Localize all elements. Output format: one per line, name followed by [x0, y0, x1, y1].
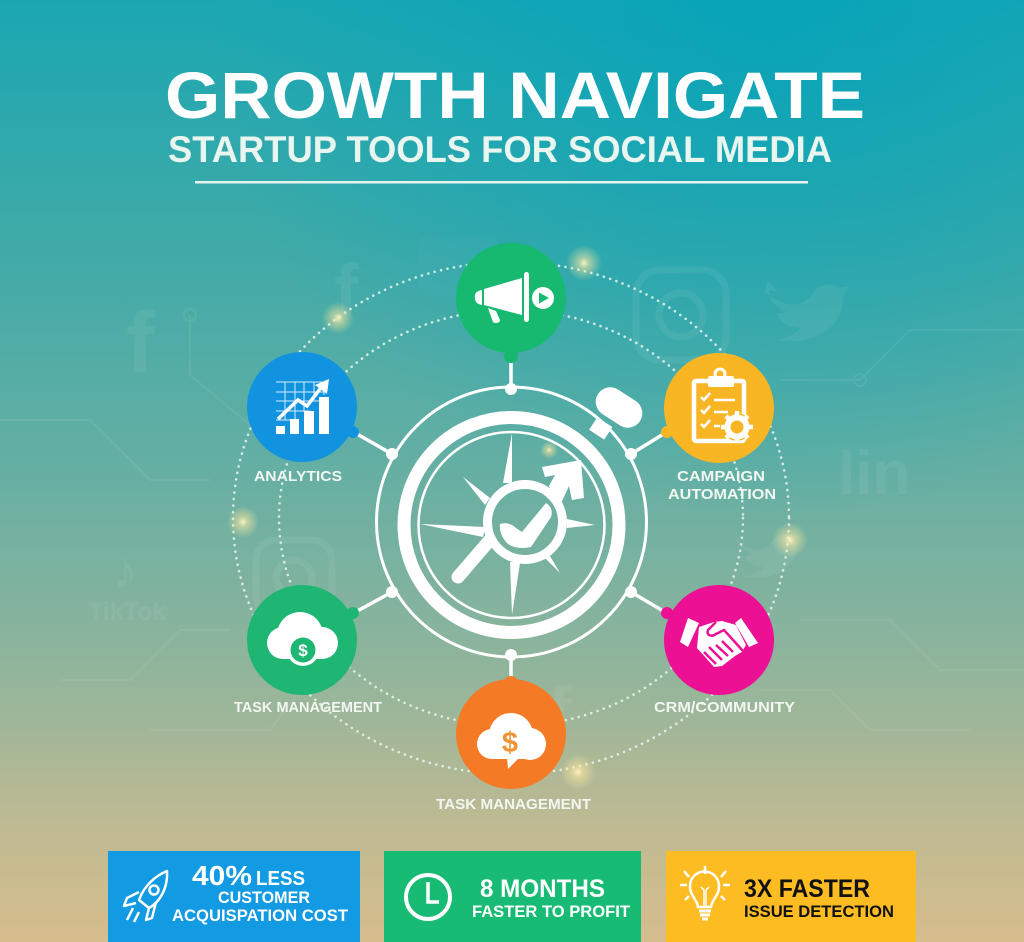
outer thin ring [376, 387, 646, 657]
faint social media watermarks [88, 236, 910, 750]
stat text: ACQUISPATION COST [172, 906, 349, 925]
faint social media watermarks: lin [838, 439, 910, 508]
subtitle: STARTUP TOOLS FOR SOCIAL MEDIA [168, 129, 832, 170]
icon: cloud with dollar [267, 612, 338, 666]
stat text: 3X FASTER [744, 875, 870, 903]
icon: light bulb [680, 866, 730, 919]
magnifier handle [458, 541, 489, 577]
icon: cloud speech bubble with dollar [477, 713, 546, 769]
label: TASK MANAGEMENT [234, 699, 382, 716]
thick ring [404, 418, 619, 632]
stat text [472, 875, 631, 921]
icon: megaphone [475, 272, 554, 323]
dotted orbit rings [233, 262, 789, 774]
faint social media watermarks: f [126, 295, 155, 391]
label: TASK MANAGEMENT [436, 796, 591, 813]
node: campaign automation [661, 353, 776, 503]
stat text: 40% [192, 860, 252, 891]
glowing light particles [227, 245, 808, 790]
node: campaign automation: AUTOMATION [668, 486, 776, 503]
stat card: customer acquisition cost [108, 851, 360, 942]
faint social media watermarks: ♪ [112, 542, 138, 600]
inner thin ring [418, 432, 604, 618]
stopwatch crown [589, 382, 648, 440]
growth arrow [542, 460, 584, 510]
icon: rocket [124, 871, 167, 922]
icon: cloud with dollar: $ [298, 641, 308, 660]
faint social media watermarks: f [548, 672, 572, 750]
icon: growth chart [276, 379, 329, 434]
node: crm community [654, 585, 795, 716]
stat text [172, 860, 349, 925]
stat card: faster issue detection [666, 851, 916, 942]
stat card: months faster to profit [384, 851, 641, 942]
label: CRM/COMMUNITY [654, 699, 795, 716]
title: GROWTH NAVIGATE [165, 58, 865, 132]
stat text: 8 MONTHS [480, 875, 605, 903]
node: top megaphone [456, 243, 566, 363]
icon: clipboard with gear [694, 369, 753, 443]
stat text: LESS [256, 868, 305, 890]
node: left task management [234, 585, 382, 716]
stat text: ISSUE DETECTION [744, 902, 894, 921]
icon: clock [406, 875, 450, 919]
compass spikes [420, 433, 595, 615]
ring junction dots [386, 383, 637, 661]
node: bottom task management [436, 676, 591, 813]
stat text: FASTER TO PROFIT [472, 902, 631, 921]
faint social media watermarks: f [334, 249, 359, 332]
faint social media watermarks: TikTok [88, 598, 166, 626]
check mark [500, 503, 552, 548]
central compass emblem [376, 382, 648, 661]
icon: handshake [680, 618, 758, 667]
magnifier lens [488, 484, 562, 560]
node: analytics [247, 352, 359, 485]
label: CAMPAIGN [677, 468, 765, 485]
icon: cloud speech bubble with dollar: $ [502, 727, 518, 759]
stat text: CUSTOMER [218, 888, 310, 907]
faint circuit lines [0, 309, 1024, 730]
stat text [744, 875, 894, 921]
label: ANALYTICS [254, 468, 342, 485]
connector lines [350, 350, 670, 690]
